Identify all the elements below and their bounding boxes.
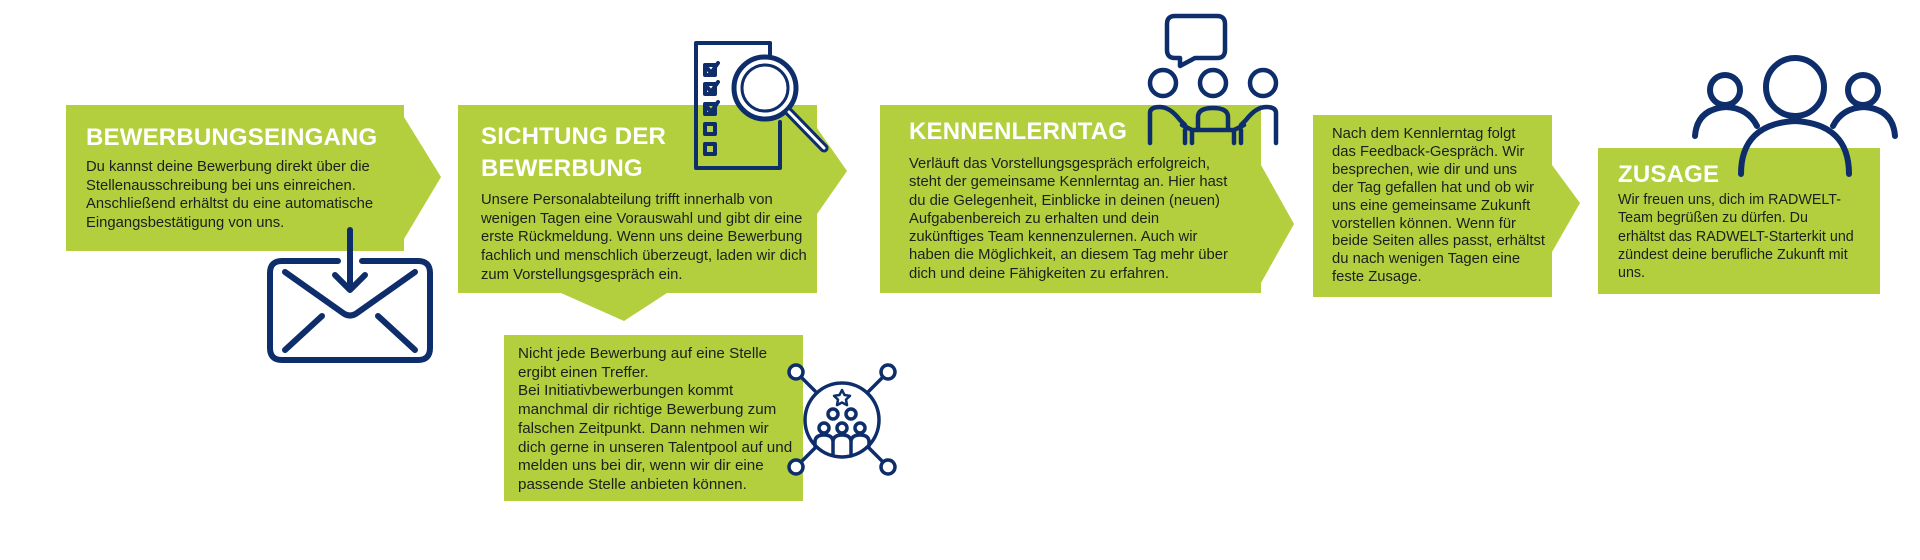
text block: Sichtung: erste Rückmeldung. Wenn uns deine Bewerbung bbox=[481, 229, 802, 245]
text block: Zusage: Wir freuen uns, dich im RADWELT- bbox=[1618, 192, 1841, 208]
text block: Feedback: uns eine gemeinsame Zukunft bbox=[1332, 198, 1530, 214]
panel: Sichtung der Bewerbung bbox=[458, 105, 847, 321]
text block: Bewerbungseingang bbox=[86, 159, 373, 231]
text block: Talentpool bbox=[518, 345, 792, 493]
icon: talent network bbox=[787, 363, 897, 476]
text block: Zusage: uns. bbox=[1618, 265, 1645, 281]
heading: Zusage: ZUSAGE bbox=[1618, 161, 1719, 188]
text block: Kennenlerntag: dich und deine Fähigkeiten zu erfahren. bbox=[909, 266, 1169, 282]
panel: Bewerbungseingang bbox=[66, 105, 441, 251]
icon: team of three people bbox=[1692, 55, 1898, 177]
text block: Feedback: der Tag gefallen hat und ob wir bbox=[1332, 180, 1534, 196]
text block: Sichtung: fachlich und menschlich überzeugt, laden wir dich bbox=[481, 248, 807, 264]
text block: Zusage bbox=[1618, 192, 1854, 281]
panel: Kennenlerntag bbox=[880, 105, 1294, 293]
panel: Zusage bbox=[1598, 148, 1880, 294]
text block: Kennenlerntag: zukünftiges Team kennenzulernen. Auch wir bbox=[909, 229, 1197, 245]
heading: Sichtung der Bewerbung: BEWERBUNG bbox=[481, 155, 643, 182]
text block: Feedback bbox=[1332, 126, 1545, 285]
heading: Bewerbungseingang: BEWERBUNGSEINGANG bbox=[86, 124, 377, 151]
heading: Sichtung der Bewerbung: SICHTUNG DER bbox=[481, 123, 666, 150]
icon: meeting group with speech bubble bbox=[1148, 14, 1278, 146]
text block: Feedback: das Feedback-Gespräch. Wir bbox=[1332, 144, 1524, 160]
text block: Sichtung bbox=[481, 192, 807, 283]
text block: Zusage: erhältst das RADWELT-Starterkit und bbox=[1618, 229, 1854, 245]
text block: Feedback: Nach dem Kennlerntag folgt bbox=[1332, 126, 1515, 142]
text block: Kennenlerntag: haben die Möglichkeit, an diesem Tag mehr über bbox=[909, 247, 1228, 263]
text block: Talentpool: melden uns bei dir, wenn wir dir eine bbox=[518, 457, 764, 474]
text block: Talentpool: dich gerne in unseren Talentpool auf und bbox=[518, 439, 792, 456]
text block: Feedback: vorstellen können. Wenn für bbox=[1332, 216, 1516, 232]
icon: checklist with magnifier bbox=[694, 41, 828, 170]
text block: Kennenlerntag: Verläuft das Vorstellungsgespräch erfolgreich, bbox=[909, 156, 1210, 172]
text block: Talentpool: manchmal dir richtige Bewerbung zum bbox=[518, 401, 776, 418]
heading: Sichtung der Bewerbung bbox=[481, 123, 666, 182]
text block: Kennenlerntag: du die Gelegenheit, Einblicke in deinen (neuen) bbox=[909, 193, 1220, 209]
text block: Kennenlerntag bbox=[909, 156, 1228, 282]
text block: Sichtung: zum Vorstellungsgespräch ein. bbox=[481, 267, 683, 283]
text block: Kennenlerntag: steht der gemeinsame Kennlerntag an. Hier hast bbox=[909, 174, 1227, 190]
icon: envelope with arrow bbox=[267, 227, 433, 363]
text block: Bewerbungseingang: Du kannst deine Bewerbung direkt über die bbox=[86, 159, 370, 175]
text block: Feedback: du nach wenigen Tagen eine bbox=[1332, 251, 1520, 267]
text block: Feedback: beide Seiten alles passt, erhältst bbox=[1332, 233, 1545, 249]
text block: Bewerbungseingang: Stellenausschreibung bei uns einreichen. bbox=[86, 178, 356, 194]
text block: Feedback: feste Zusage. bbox=[1332, 269, 1422, 285]
heading: Kennenlerntag: KENNENLERNTAG bbox=[909, 118, 1127, 145]
text block: Talentpool: falschen Zeitpunkt. Dann nehmen wir bbox=[518, 420, 769, 437]
text block: Talentpool: ergibt einen Treffer. bbox=[518, 364, 649, 381]
text block: Sichtung: Unsere Personalabteilung trifft innerhalb von bbox=[481, 192, 773, 208]
text block: Kennenlerntag: Aufgabenbereich zu erhalten und dein bbox=[909, 211, 1159, 227]
text block: Sichtung: wenigen Tagen eine Vorauswahl und gibt dir eine bbox=[481, 211, 802, 227]
text block: Talentpool: Bei Initiativbewerbungen kommt bbox=[518, 382, 733, 399]
text block: Zusage: zündest deine berufliche Zukunft mit bbox=[1618, 247, 1848, 263]
text block: Talentpool: passende Stelle anbieten können. bbox=[518, 476, 747, 493]
panel: Feedback-Gespräch bbox=[1313, 115, 1580, 297]
panel: Talentpool note bbox=[504, 335, 803, 501]
text block: Talentpool: Nicht jede Bewerbung auf eine Stelle bbox=[518, 345, 767, 362]
text block: Bewerbungseingang: Anschließend erhältst du eine automatische bbox=[86, 196, 373, 212]
text block: Feedback: besprechen, wie dir und uns bbox=[1332, 162, 1517, 178]
text block: Zusage: Team begrüßen zu dürfen. Du bbox=[1618, 210, 1808, 226]
text block: Bewerbungseingang: Eingangsbestätigung von uns. bbox=[86, 215, 284, 231]
